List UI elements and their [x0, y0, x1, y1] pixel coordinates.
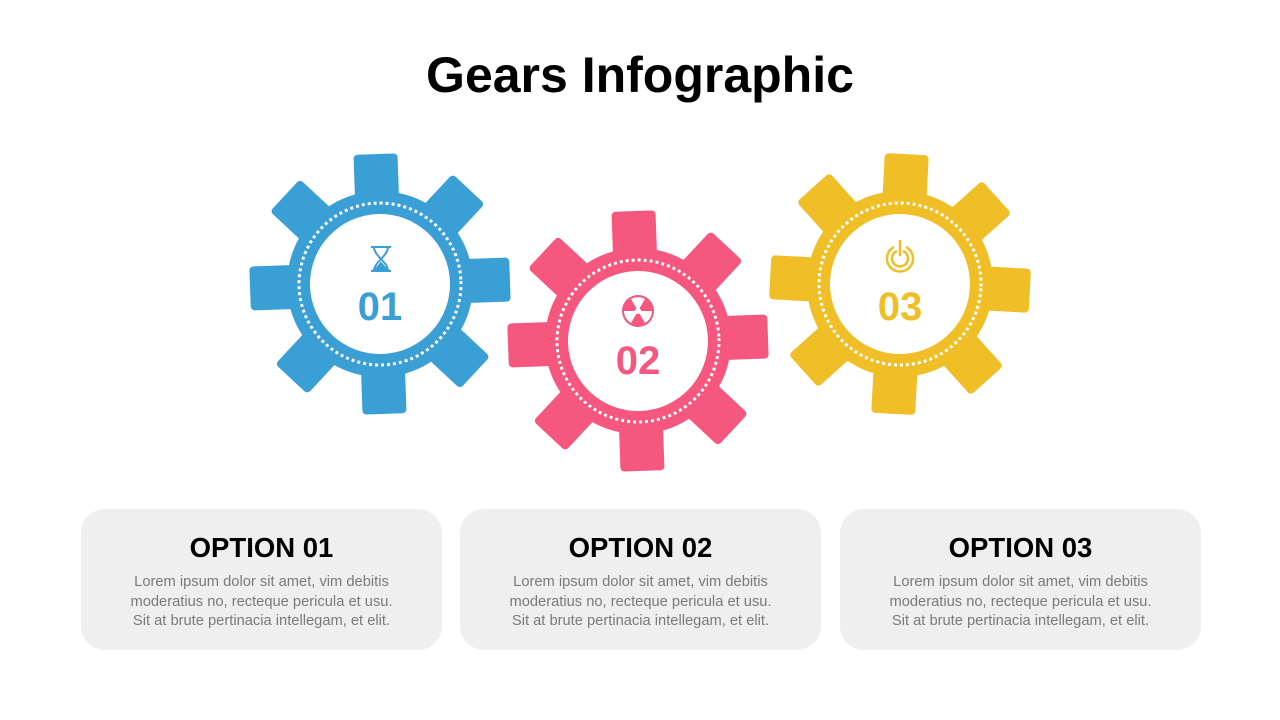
panel: option 01 [81, 509, 442, 650]
title: Gears Infographic [426, 47, 854, 103]
gear 03 [763, 147, 1037, 421]
icon: hourglass [371, 247, 391, 271]
panel: option 03: Lorem ipsum dolor sit amet, vim debitis [893, 574, 1148, 590]
panel: option 01: Lorem ipsum dolor sit amet, vim debitis [134, 574, 389, 590]
number 02: 02 [616, 339, 660, 383]
icon: radiation [622, 295, 654, 327]
panel: option 03: moderatius no, recteque pericula et usu. [889, 594, 1152, 610]
panel: option 02: Sit at brute pertinacia intellegam, et elit. [512, 613, 769, 629]
panel: option 02: moderatius no, recteque pericula et usu. [509, 594, 772, 610]
number 01: 01 [358, 285, 402, 329]
number 03: 03 [878, 285, 922, 329]
panel: option 02: Lorem ipsum dolor sit amet, vim debitis [513, 574, 768, 590]
panel: option 01: Sit at brute pertinacia intellegam, et elit. [133, 613, 390, 629]
panel: option 01: OPTION 01 [190, 532, 333, 563]
panel: option 03: Sit at brute pertinacia intellegam, et elit. [892, 613, 1149, 629]
icon: power [887, 240, 913, 272]
panel: option 01: moderatius no, recteque pericula et usu. [130, 594, 393, 610]
gear 01 [246, 150, 514, 418]
panel: option 02: OPTION 02 [569, 532, 712, 563]
panel: option 02 [460, 509, 821, 650]
panel: option 03 [840, 509, 1201, 650]
panel: option 03: OPTION 03 [949, 532, 1092, 563]
gear 02 [504, 207, 772, 475]
